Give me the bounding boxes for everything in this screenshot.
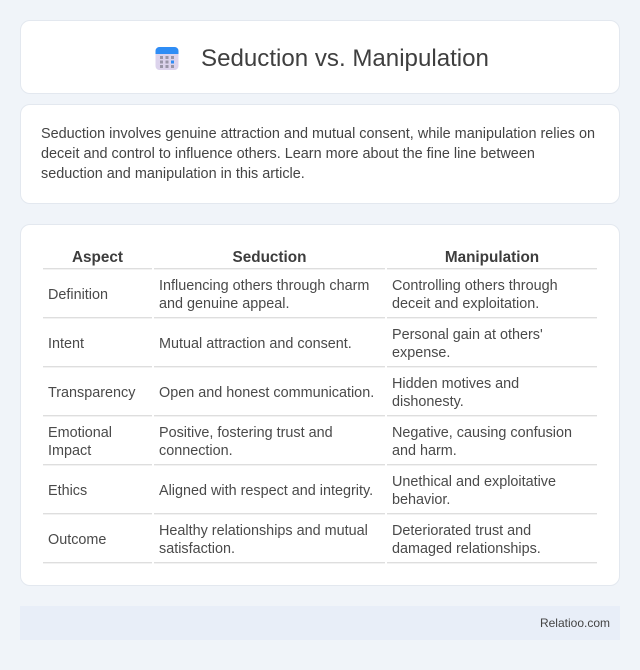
Outcome: manipulation bbox=[392, 523, 541, 557]
row: Intent: Intent bbox=[48, 336, 84, 352]
row: Emotional Impact bbox=[48, 425, 112, 459]
Emotional Impact: seduction bbox=[159, 425, 333, 459]
Emotional Impact: manipulation bbox=[392, 425, 572, 459]
Definition: manipulation: deceit and exploitation. bbox=[392, 296, 539, 312]
panel: comparison table bbox=[20, 224, 620, 586]
Ethics: manipulation: Unethical and exploitative bbox=[392, 474, 556, 490]
header: Aspect: Aspect bbox=[72, 249, 123, 266]
row: Transparency: Transparency bbox=[48, 385, 135, 401]
intro text bbox=[41, 126, 595, 182]
Intent: manipulation bbox=[392, 327, 543, 361]
footer source: Relatioo.com bbox=[540, 616, 610, 630]
Intent: manipulation: Personal gain at others' bbox=[392, 327, 543, 343]
Transparency: manipulation: Hidden motives and bbox=[392, 376, 519, 392]
Emotional Impact: seduction: Positive, fostering trust and bbox=[159, 425, 333, 441]
panel: introduction bbox=[20, 104, 620, 204]
Ethics: manipulation bbox=[392, 474, 556, 508]
intro text: Seduction involves genuine attraction and mutual consent, while manipulation relies on bbox=[41, 126, 595, 142]
Definition: manipulation bbox=[392, 278, 558, 312]
Definition: seduction: Influencing others through charm bbox=[159, 278, 369, 294]
intro text: seduction and manipulation in this article. bbox=[41, 166, 305, 182]
footer bbox=[20, 606, 620, 640]
Emotional Impact: manipulation: Negative, causing confusion bbox=[392, 425, 572, 441]
Outcome: manipulation: damaged relationships. bbox=[392, 541, 541, 557]
Ethics: seduction: Aligned with respect and integrity. bbox=[159, 483, 373, 499]
row: Definition: Definition bbox=[48, 287, 108, 303]
Intent: seduction: Mutual attraction and consent. bbox=[159, 336, 352, 352]
row: Ethics: Ethics bbox=[48, 483, 87, 499]
Definition: seduction bbox=[159, 278, 369, 312]
Transparency: manipulation: dishonesty. bbox=[392, 394, 464, 410]
Outcome: manipulation: Deteriorated trust and bbox=[392, 523, 531, 539]
intro text: deceit and control to influence others. Learn more about the fine line between bbox=[41, 146, 535, 162]
Outcome: seduction bbox=[159, 523, 368, 557]
row: Emotional Impact: Emotional bbox=[48, 425, 112, 441]
Emotional Impact: seduction: connection. bbox=[159, 443, 233, 459]
row: Emotional Impact: Impact bbox=[48, 443, 91, 459]
icon: calendar bbox=[156, 47, 178, 70]
title: Seduction vs. Manipulation bbox=[201, 45, 489, 72]
header: Manipulation: Manipulation bbox=[445, 249, 539, 266]
header: Seduction: Seduction bbox=[233, 249, 306, 266]
Definition: seduction: and genuine appeal. bbox=[159, 296, 289, 312]
row: Outcome: Outcome bbox=[48, 532, 106, 548]
Transparency: manipulation bbox=[392, 376, 519, 410]
Outcome: seduction: Healthy relationships and mutual bbox=[159, 523, 368, 539]
Intent: manipulation: expense. bbox=[392, 345, 450, 361]
Emotional Impact: manipulation: and harm. bbox=[392, 443, 457, 459]
Ethics: manipulation: behavior. bbox=[392, 492, 450, 508]
Definition: manipulation: Controlling others through bbox=[392, 278, 558, 294]
panel: title card bbox=[20, 20, 620, 94]
Outcome: seduction: satisfaction. bbox=[159, 541, 235, 557]
Transparency: seduction: Open and honest communication. bbox=[159, 385, 374, 401]
